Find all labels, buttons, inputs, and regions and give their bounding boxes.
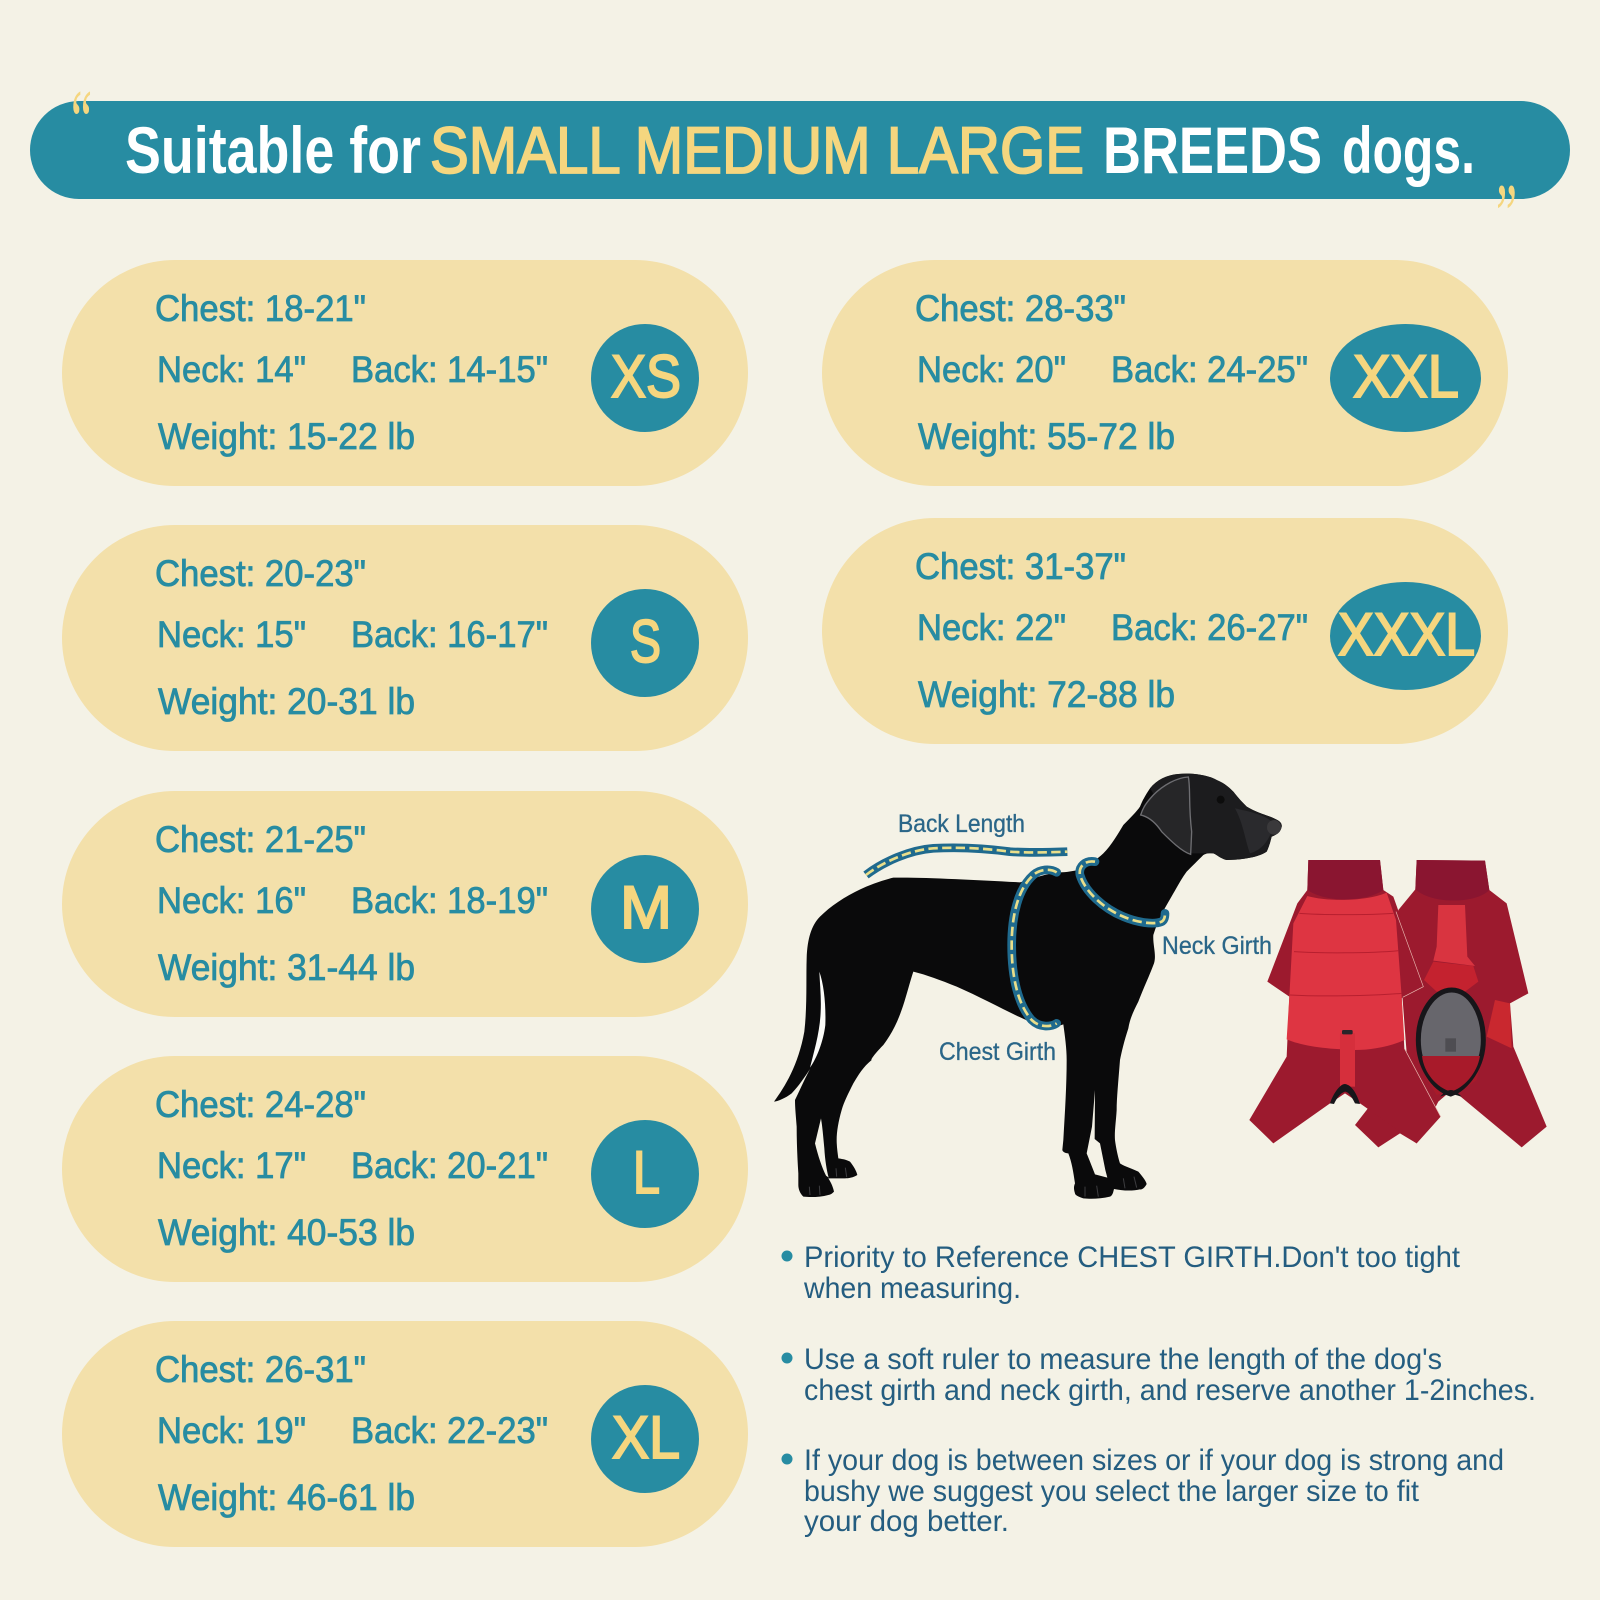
dog eye — [1217, 796, 1225, 804]
size card: XL: XL — [612, 1404, 680, 1471]
size card: L — [62, 1056, 748, 1282]
suit belly view — [1355, 860, 1547, 1147]
size card: XS: Back: 14-15" — [351, 349, 548, 390]
gap between front legs — [1087, 1090, 1107, 1178]
size card: XL: Neck: 19" — [157, 1410, 306, 1451]
size card: M: Chest: 21-25" — [155, 819, 366, 860]
belly opening — [1418, 990, 1483, 1094]
size card: L: Weight: 40-53 lb — [158, 1212, 415, 1253]
dog nose — [1267, 820, 1281, 835]
bullet note: soft ruler: chest girth and neck girth, and reserve another 1-2inches. — [804, 1374, 1536, 1407]
bullet note: between sizes: If your dog is between sizes or if your dog is strong and — [804, 1444, 1504, 1477]
label: neck girth: Neck Girth — [1162, 932, 1272, 960]
dog tail highlight — [810, 972, 825, 1068]
size card: XL — [62, 1321, 748, 1547]
size card: XS: XS — [611, 343, 681, 410]
size card: XL: Chest: 26-31" — [155, 1349, 366, 1390]
bullet note: between sizes: your dog better. — [804, 1505, 1009, 1538]
size card: M: Neck: 16" — [157, 880, 306, 921]
bullet note: soft ruler: Use a soft ruler to measure the length of the dog's — [804, 1343, 1442, 1376]
dog ear — [1141, 777, 1192, 854]
size card: S: Weight: 20-31 lb — [158, 681, 415, 722]
size card: XS — [62, 260, 748, 486]
size card: XXXL: Weight: 72-88 lb — [918, 674, 1175, 715]
illustration: red dog suit, back view and belly view — [1249, 860, 1547, 1147]
size card: XXL: Back: 24-25" — [1111, 349, 1308, 390]
size card: L: Neck: 17" — [157, 1145, 306, 1186]
size card: XXXL: Neck: 22" — [917, 607, 1066, 648]
dog muzzle shading — [1235, 808, 1273, 853]
size card: S: Chest: 20-23" — [155, 553, 366, 594]
bullet note: chest girth priority — [782, 1241, 1460, 1305]
size card: L: Chest: 24-28" — [155, 1084, 366, 1125]
title banner: ” — [1496, 167, 1517, 264]
bullet note: chest girth priority: Priority to Reference CHEST GIRTH.Don't too tight — [804, 1241, 1460, 1274]
size card: M: Weight: 31-44 lb — [158, 947, 415, 988]
size card: S — [62, 525, 748, 751]
size card: M: M — [620, 874, 672, 941]
title banner: BREEDS — [1103, 113, 1322, 187]
size card: M — [62, 791, 748, 1017]
size card: XXXL: XXXL — [1338, 601, 1475, 668]
size card: S: Neck: 15" — [157, 614, 306, 655]
gap between hind legs — [815, 1118, 829, 1178]
title banner: “ — [71, 73, 92, 170]
label: chest girth: Chest Girth — [939, 1038, 1056, 1066]
size card: XXXL: Chest: 31-37" — [915, 546, 1126, 587]
size card: XXXL: Back: 26-27" — [1111, 607, 1308, 648]
neck girth strap — [1080, 861, 1165, 923]
size card: XL: Back: 22-23" — [351, 1410, 548, 1451]
bullet note: soft ruler — [782, 1343, 1536, 1407]
suit back view — [1249, 860, 1441, 1143]
size card: S: S — [630, 608, 661, 675]
size card: XXL: Neck: 20" — [917, 349, 1066, 390]
title banner: dogs. — [1342, 113, 1475, 187]
size card: XXL — [822, 260, 1508, 486]
title banner: SMALL MEDIUM LARGE — [430, 113, 1084, 187]
size card: L: L — [633, 1139, 660, 1206]
bullet note: chest girth priority: when measuring. — [803, 1272, 1021, 1305]
size card: XS: Chest: 18-21" — [155, 288, 366, 329]
size card: XS: Neck: 14" — [157, 349, 306, 390]
bullet note: between sizes — [782, 1444, 1504, 1538]
bullet note: between sizes: bushy we suggest you select the larger size to fit — [804, 1475, 1419, 1508]
dog head shading — [1150, 774, 1282, 860]
size card: M: Back: 18-19" — [351, 880, 548, 921]
size card: XL: Weight: 46-61 lb — [158, 1477, 415, 1518]
chest girth strap — [1012, 870, 1057, 1026]
size card: XS: Weight: 15-22 lb — [158, 416, 415, 457]
size card: S: Back: 16-17" — [351, 614, 548, 655]
label: back length: Back Length — [898, 810, 1025, 838]
illustration: black dog with measuring straps — [774, 774, 1282, 1199]
size card: L: Back: 20-21" — [351, 1145, 548, 1186]
size card: XXL: Weight: 55-72 lb — [918, 416, 1175, 457]
dog paw toes — [809, 1168, 1137, 1197]
size card: XXL: XXL — [1353, 343, 1459, 410]
title banner — [30, 73, 1570, 264]
size card: XXL: Chest: 28-33" — [915, 288, 1126, 329]
title banner: Suitable for — [125, 113, 421, 187]
back length strap — [866, 848, 1067, 875]
size card: XXXL — [822, 518, 1508, 744]
